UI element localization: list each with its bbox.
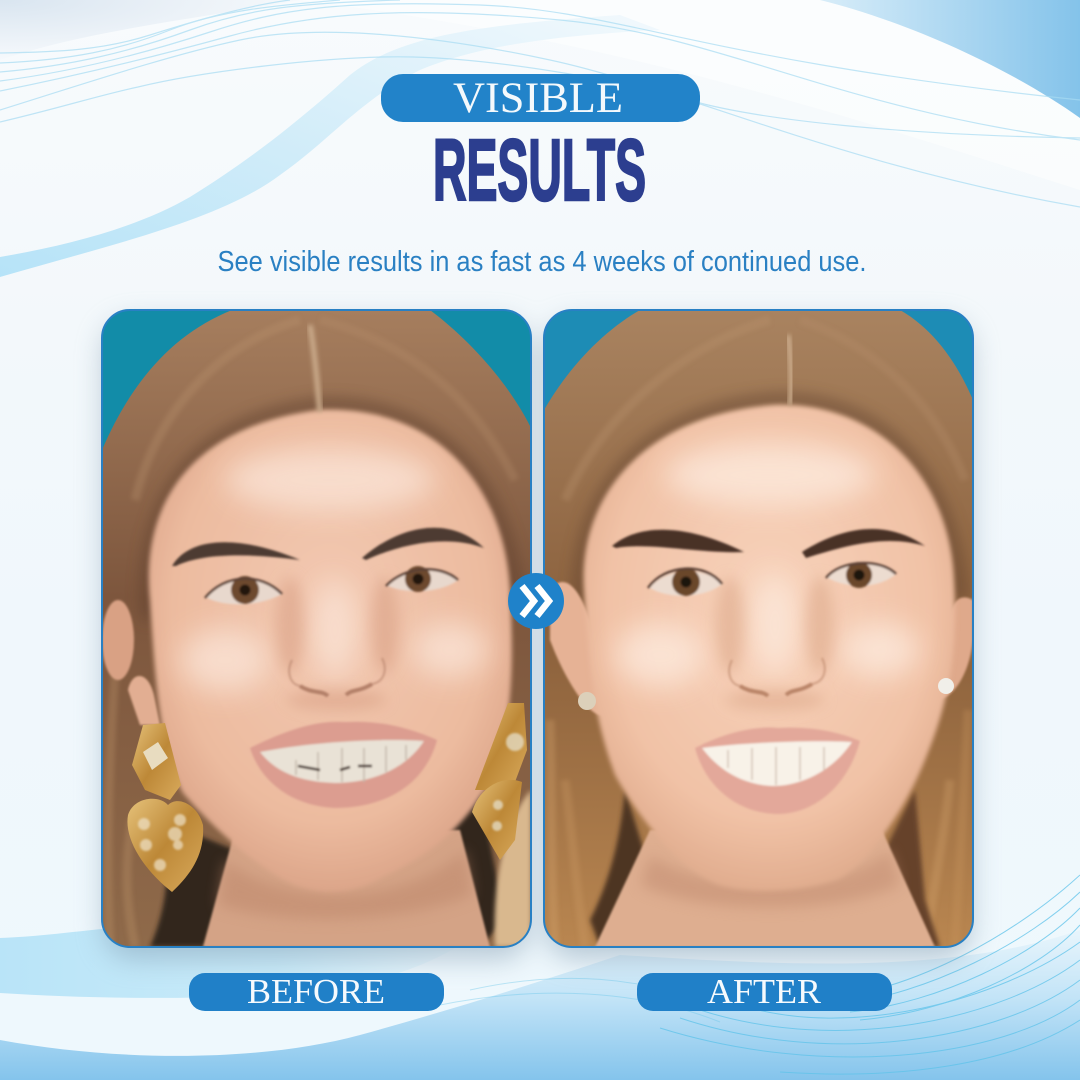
heading: visible pill [381,74,700,122]
eyes: before [205,566,458,604]
label: after: AFTER [707,972,822,1011]
brows: after [612,529,925,558]
after photo border [544,310,973,947]
label: before: BEFORE [247,972,385,1011]
ears: after [550,582,605,715]
nose: before [289,658,385,696]
cheek highlights: after [615,443,920,687]
brows: before [172,528,484,566]
mouth: after [695,728,860,814]
panel: after photo [544,310,973,947]
side nose shade: after [716,577,834,710]
label: after [637,972,892,1011]
inner hair shadow: before [147,405,516,620]
mouth: before [250,722,437,808]
side nose shade: before [276,577,399,710]
eyes: after [648,562,896,596]
nose: after [729,658,825,696]
inner hair shadow: after [579,400,960,610]
neck: before [203,830,490,947]
cheek highlights: before [180,448,488,692]
neck: after [595,830,935,947]
hair: after [544,310,973,947]
subtitle: See visible results in as fast as 4 weeks of continued use. [218,246,866,278]
heading: results: RESULTS [433,122,646,219]
dark hair: before [148,834,231,946]
ear: before [102,600,134,680]
before photo border [102,310,531,947]
panel shadows [104,322,971,959]
dark hair: after [590,790,650,947]
icon: chevron arrow [508,573,564,629]
face: after [584,405,955,890]
heading: visible pill: VISIBLE [453,75,623,122]
label: before [189,972,444,1011]
earrings: after [578,678,954,710]
face: before [149,410,512,892]
hair: before [102,310,531,947]
earrings: before [127,703,527,892]
panel: before photo [102,310,531,947]
